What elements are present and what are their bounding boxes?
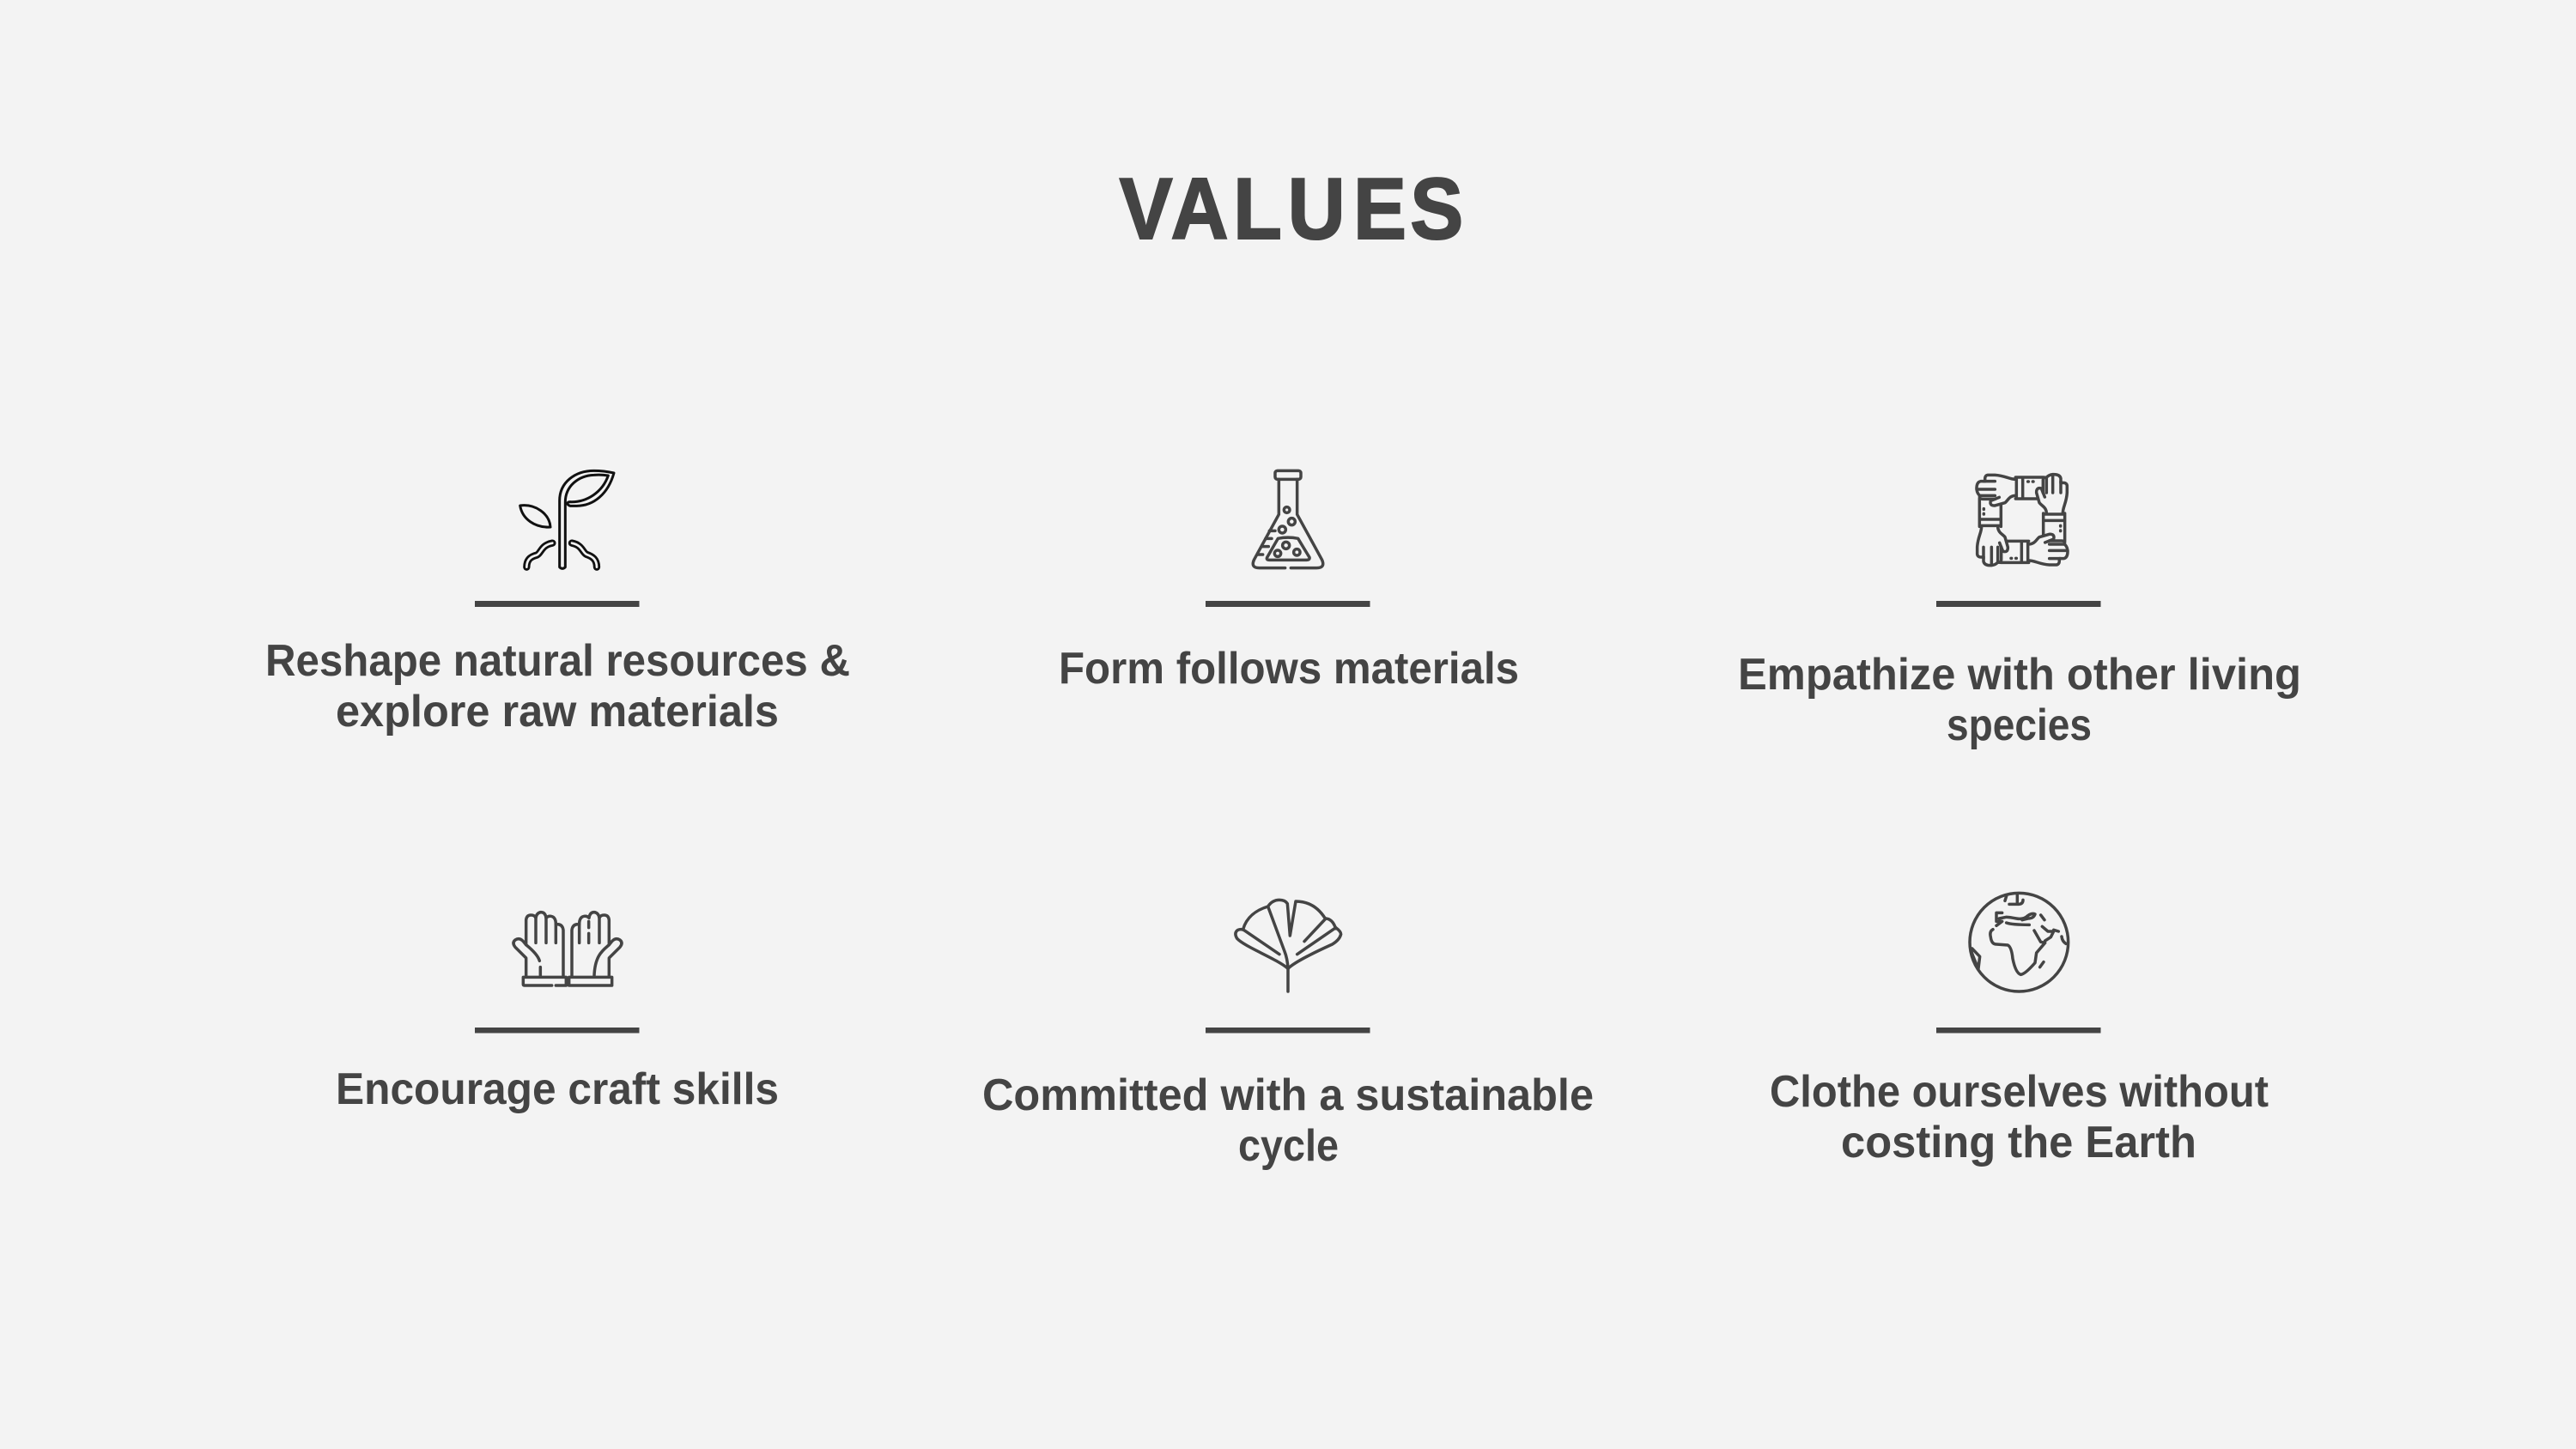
icon: gloves	[513, 912, 622, 985]
text: encourage craft skills: Encourage craft skills	[336, 1064, 779, 1114]
panel: reshape natural resources	[265, 470, 850, 737]
divider	[475, 601, 639, 607]
text: sustainable cycle: Committed with a sustainable	[982, 1070, 1594, 1120]
divider	[475, 1028, 639, 1034]
text: clothe ourselves: Clothe ourselves without	[1770, 1067, 2269, 1117]
text: empathize: species	[1947, 700, 2092, 750]
text: clothe ourselves: costing the Earth	[1841, 1118, 2196, 1167]
panel: form follows materials	[1059, 470, 1519, 694]
divider	[1936, 1028, 2100, 1034]
icon: four linked hands	[1977, 475, 2068, 566]
text: clothe ourselves	[1770, 1067, 2269, 1167]
text: reshape: explore raw materials	[336, 687, 779, 737]
text: reshape: Reshape natural resources &	[265, 636, 850, 686]
title: VALUES	[1120, 160, 1463, 258]
panel: clothe ourselves	[1770, 893, 2269, 1167]
text: sustainable cycle: cycle	[1238, 1121, 1339, 1171]
text: sustainable cycle	[982, 1070, 1594, 1171]
divider	[1936, 601, 2100, 607]
divider	[1206, 601, 1370, 607]
divider	[1206, 1028, 1370, 1034]
panel: encourage craft skills	[336, 912, 779, 1114]
icon: earth globe	[1970, 893, 2069, 991]
icon: ginkgo leaf	[1236, 900, 1341, 991]
icon: flask	[1253, 470, 1323, 568]
panel: empathize	[1738, 475, 2301, 750]
text: empathize	[1738, 650, 2301, 750]
text: form follows materials: Form follows materials	[1059, 644, 1519, 694]
text: empathize: Empathize with other living	[1738, 650, 2301, 700]
icon: sprout	[520, 470, 614, 568]
text: reshape	[265, 636, 850, 737]
panel: sustainable cycle	[982, 900, 1594, 1171]
